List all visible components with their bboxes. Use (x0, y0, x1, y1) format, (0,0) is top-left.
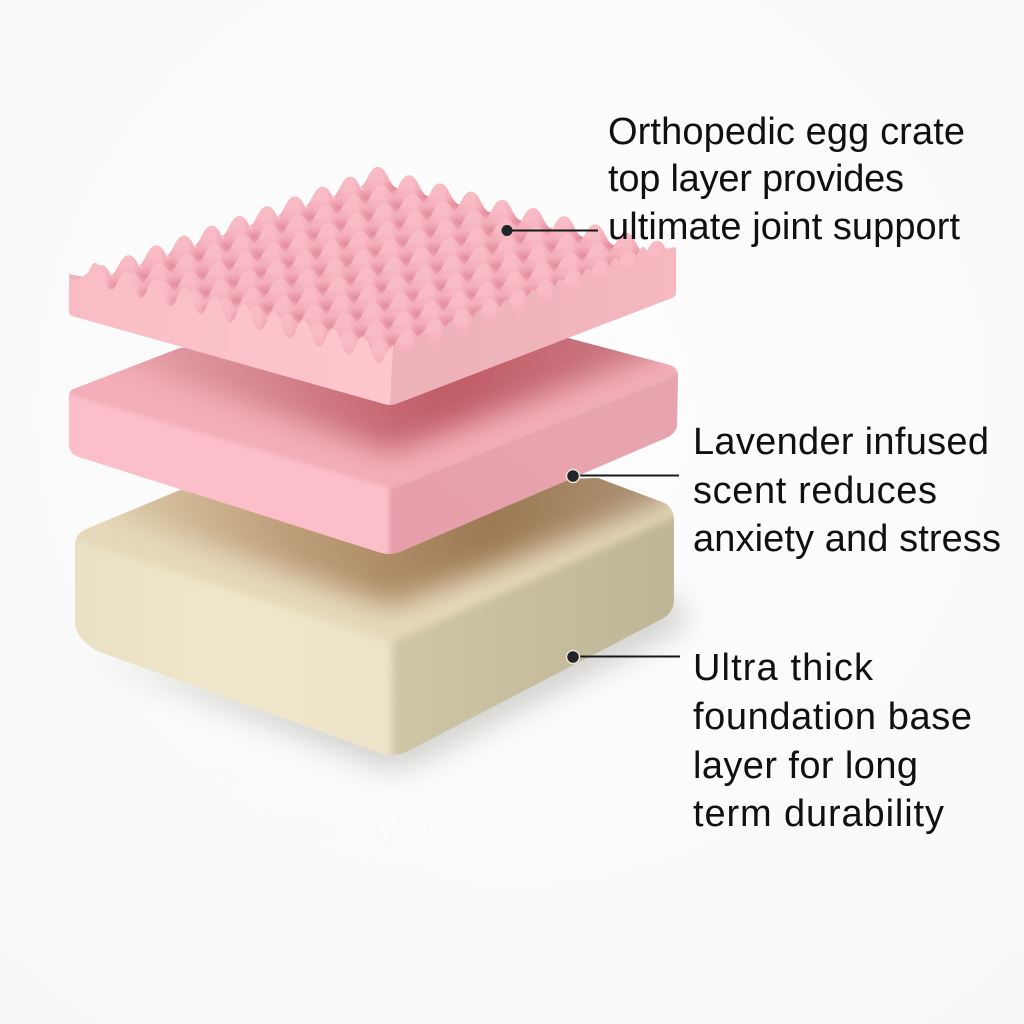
callout text: Orthopedic egg crate (608, 111, 965, 153)
callout dot (566, 650, 580, 664)
callout text: layer for long (693, 745, 918, 787)
callout text: scent reduces (693, 470, 937, 512)
base layer left face (75, 545, 396, 755)
callout leader line (573, 474, 679, 476)
faint ghost text: Ultra thick (76, 757, 246, 799)
callout leader line (507, 230, 598, 232)
middle layer faces (69, 373, 678, 554)
callout text (693, 421, 1001, 560)
egg crate right face (390, 247, 676, 405)
callout: foundation base (566, 647, 972, 835)
base layer top shadow (114, 478, 672, 620)
base layer faces (75, 514, 674, 755)
faint ghost text (76, 757, 441, 897)
middle layer top surface (60, 330, 690, 500)
base layer shadow (90, 590, 690, 770)
callout leader line (573, 656, 680, 658)
callout: lavender scent (566, 421, 1001, 560)
egg crate surface base (69, 167, 666, 364)
egg crate peaks (75, 167, 676, 365)
callout text: Lavender infused (693, 421, 989, 463)
callout dot (502, 225, 512, 236)
middle layer right face (389, 371, 682, 570)
callout text: term durability (693, 793, 944, 835)
base foam layer (75, 478, 674, 755)
middle layer ridge highlight (392, 374, 676, 487)
middle layer left face (69, 395, 392, 554)
callout text: anxiety and stress (693, 518, 1001, 560)
egg crate top layer (69, 167, 676, 405)
faint ghost text: foundation base layer (76, 805, 436, 847)
callout text: Ultra thick (693, 647, 874, 689)
callout text (608, 111, 965, 248)
base layer right face (388, 514, 674, 755)
middle layer top shadow (124, 338, 660, 464)
base layer top surface (60, 470, 690, 670)
callout text: foundation base (693, 696, 972, 738)
callout text: top layer provides (608, 158, 904, 200)
callout text: ultimate joint support (608, 206, 960, 248)
faint ghost text: for long term durability (76, 855, 441, 897)
egg crate left face (69, 263, 393, 405)
callout dot (566, 470, 580, 482)
callout: egg crate top layer (502, 111, 965, 248)
callout text (693, 647, 972, 835)
middle foam layer (69, 338, 678, 554)
